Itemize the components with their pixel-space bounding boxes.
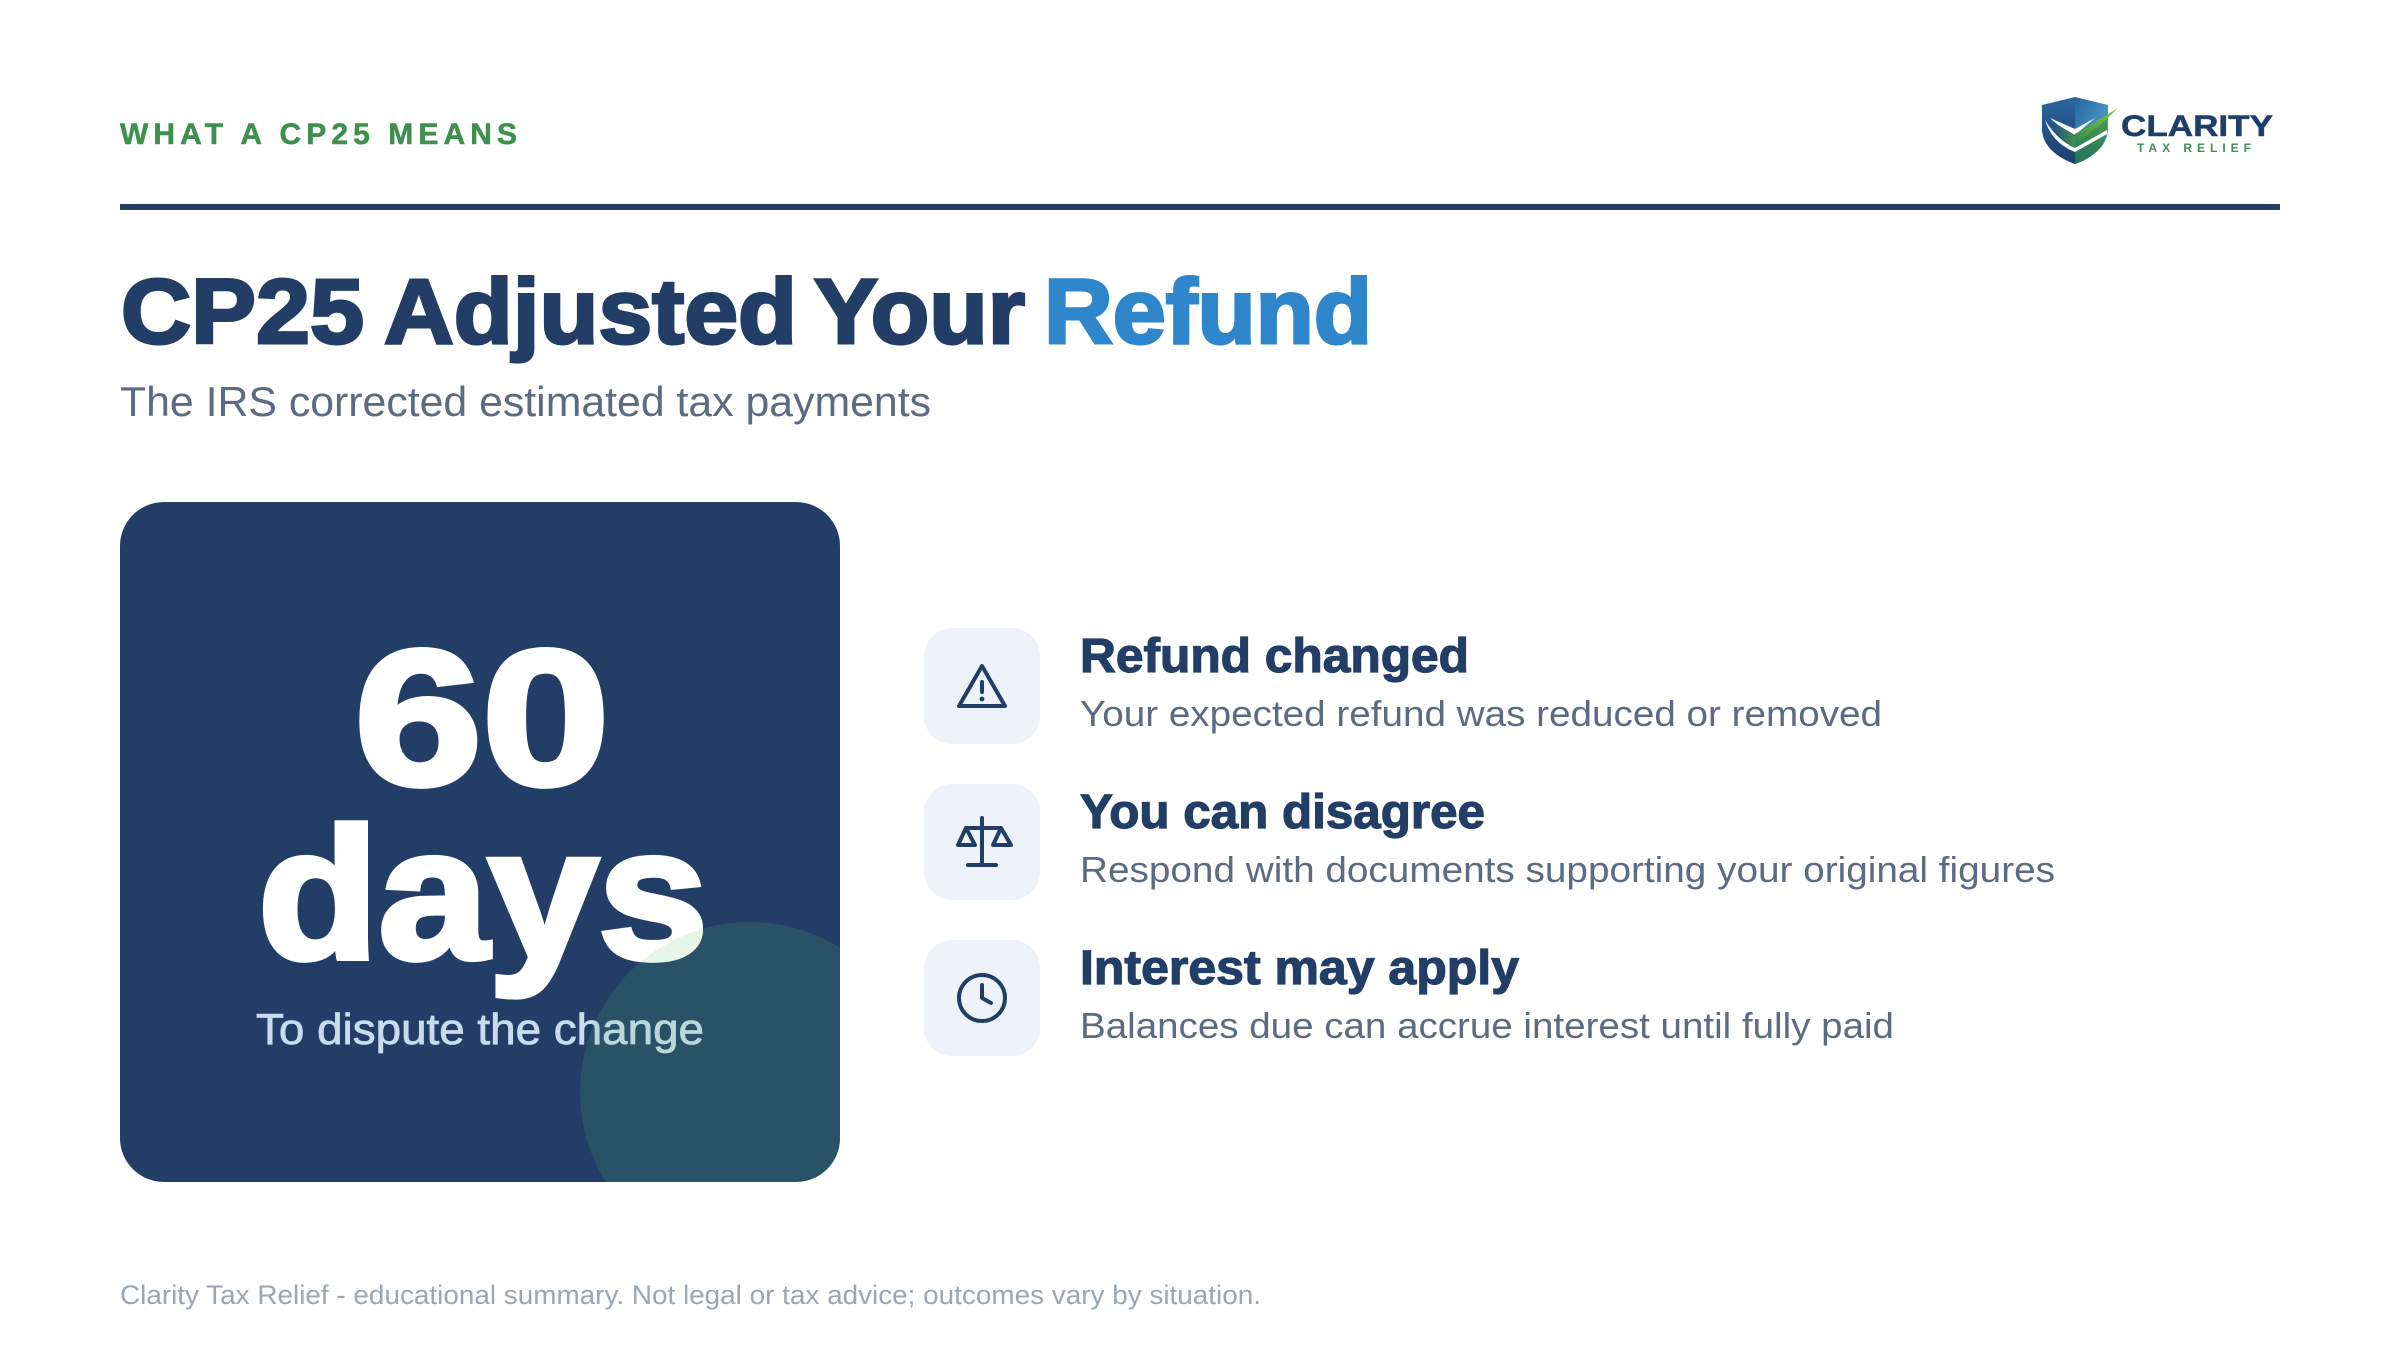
- logo: Clarity Tax Relief: [2042, 97, 2273, 164]
- big number: 60: [354, 610, 610, 825]
- icon tile: clock: [924, 940, 1040, 1056]
- item: you can disagree: [924, 784, 2055, 900]
- item description: Your expected refund was reduced or removed: [1080, 693, 1882, 734]
- title: [121, 261, 1372, 363]
- footer disclaimer: Clarity Tax Relief - educational summary. Not legal or tax advice; outcomes vary by situation.: [120, 1280, 1261, 1310]
- header rule: [120, 204, 2280, 210]
- subtitle: The IRS corrected estimated tax payments: [120, 378, 931, 425]
- icon: shield logo mark: [2042, 97, 2118, 164]
- item description: Balances due can accrue interest until fully paid: [1080, 1005, 1894, 1046]
- panel background: [120, 502, 840, 1182]
- item heading: Refund changed: [1080, 630, 1469, 683]
- big unit: days: [258, 791, 708, 998]
- logo tagline: TAX RELIEF: [2137, 141, 2251, 155]
- eyebrow label: WHAT A CP25 MEANS: [120, 118, 517, 151]
- logo wordmark: CLARITY: [2121, 110, 2273, 143]
- stat caption: To dispute the change: [256, 1005, 704, 1054]
- item: refund changed: [924, 628, 1882, 744]
- item: interest may apply: [924, 940, 1894, 1056]
- item heading: Interest may apply: [1080, 942, 1519, 995]
- title: CP25: [121, 261, 364, 363]
- decorative green circle: [580, 922, 840, 1182]
- item description: Respond with documents supporting your original figures: [1080, 849, 2055, 890]
- title: Adjusted: [384, 261, 797, 363]
- icon tile: scales: [924, 784, 1040, 900]
- icon tile: warning: [924, 628, 1040, 744]
- title: Your: [814, 261, 1025, 363]
- title: Refund: [1044, 261, 1372, 363]
- panel: 60 days stat: [120, 502, 840, 1182]
- item heading: You can disagree: [1080, 786, 1485, 839]
